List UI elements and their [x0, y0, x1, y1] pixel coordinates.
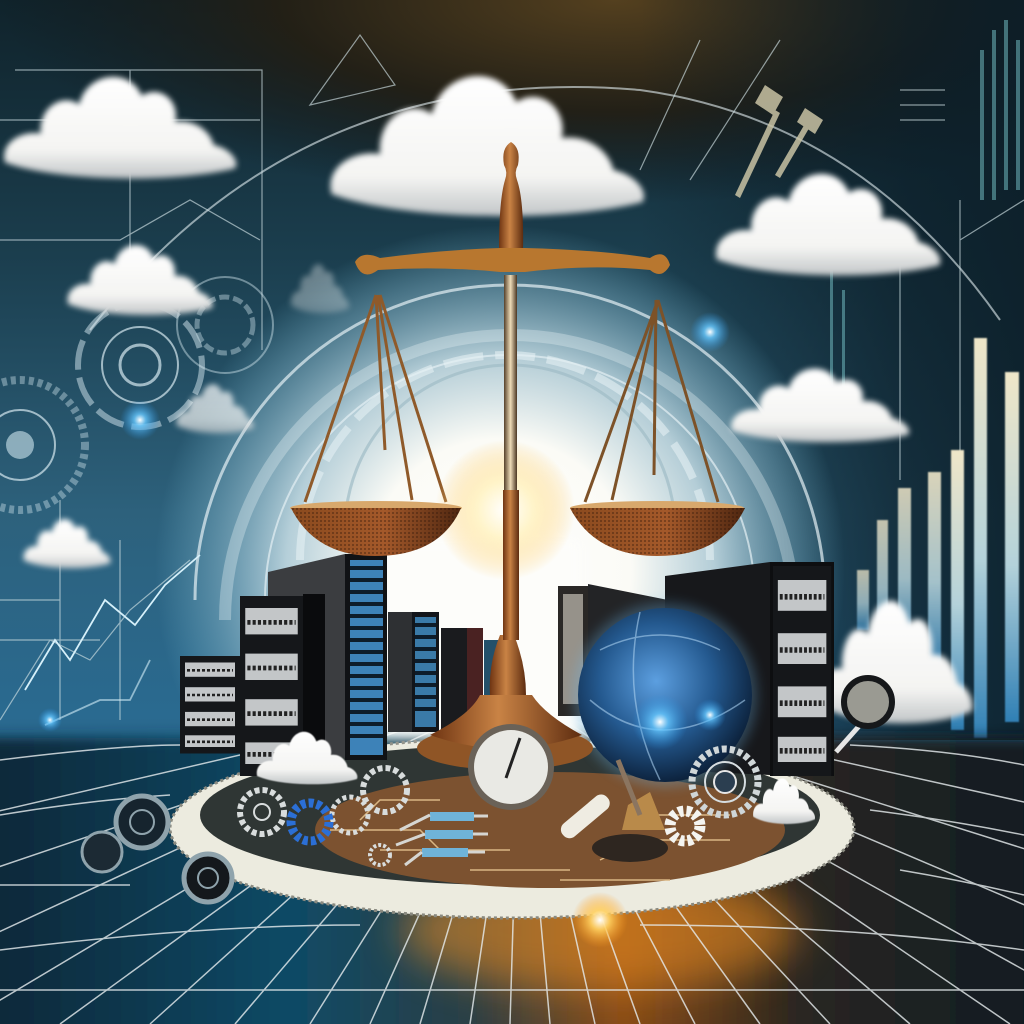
- server tower right front: [665, 562, 834, 776]
- central sunburst: [435, 440, 575, 580]
- cloud mid right: [731, 369, 909, 442]
- floor grid lines: [0, 690, 1024, 1024]
- magnifying glass: [836, 678, 892, 752]
- left pan: [290, 501, 462, 556]
- server tower right back: [558, 584, 668, 716]
- gauge dial: [468, 724, 554, 810]
- line chart left: [25, 555, 200, 725]
- gears cluster left: [240, 768, 407, 865]
- cloud faded centre: [291, 264, 349, 313]
- cloud small left: [24, 519, 111, 568]
- icon: measuring block top right: [735, 85, 823, 198]
- server tower back left: [268, 554, 387, 760]
- server low left: [180, 656, 240, 754]
- right chains: [585, 300, 718, 502]
- globe: [573, 603, 757, 787]
- cloud top right: [716, 174, 940, 275]
- small cloud right of gears: [753, 778, 815, 824]
- mechanical parts lower left: [82, 796, 232, 902]
- circular gauges left: [0, 277, 273, 510]
- beam: [355, 248, 670, 274]
- cloud lower right: [818, 601, 973, 723]
- bar chart right: [857, 338, 1019, 738]
- base: [417, 635, 593, 770]
- cloud top centre: [331, 76, 644, 216]
- large gear right: [692, 749, 758, 815]
- small towers centre: [388, 612, 500, 738]
- white gear: [670, 811, 700, 841]
- central light glow: [155, 225, 845, 915]
- blue sparkles: [38, 312, 730, 829]
- cable connectors: [396, 812, 488, 865]
- floor: [0, 738, 1024, 1024]
- cloud top left: [4, 77, 236, 178]
- right pan: [570, 501, 745, 556]
- white backdrop behind servers: [372, 540, 582, 735]
- platform: [170, 738, 854, 918]
- technical line drawings: [0, 35, 1024, 720]
- scale: [290, 142, 745, 770]
- server rack left: [240, 596, 303, 776]
- left chains: [305, 295, 446, 502]
- lever and roller tool: [558, 760, 668, 862]
- cloud faded left: [176, 384, 254, 433]
- pole: [504, 275, 517, 495]
- finial: [499, 142, 523, 250]
- data columns top right: [830, 20, 1020, 420]
- cloud mid left: [68, 245, 213, 315]
- clouds: [4, 76, 973, 723]
- concentric tech arcs: [90, 87, 1000, 620]
- orange flare: [572, 892, 628, 948]
- small cloud on platform: [257, 732, 357, 784]
- server racks: [180, 554, 834, 776]
